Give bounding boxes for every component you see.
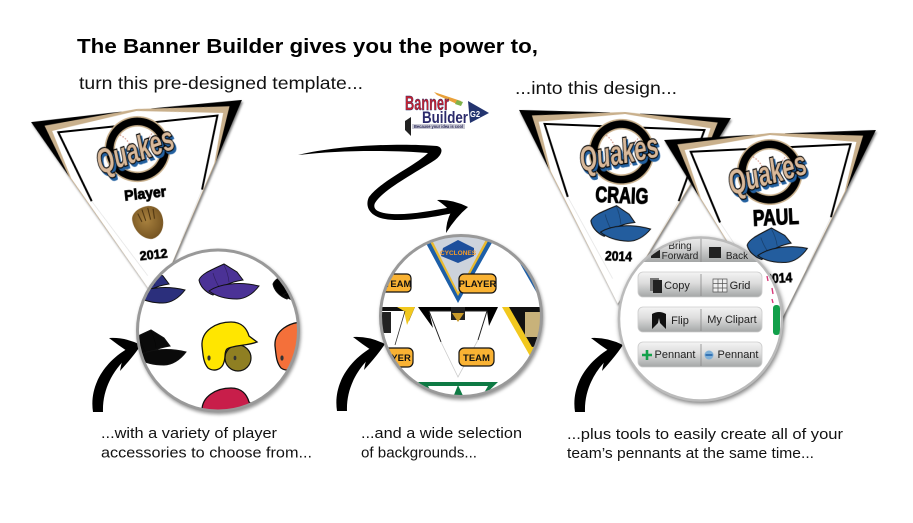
caption: tools: ...plus tools to easily create all of your <box>567 427 843 443</box>
icon: yellow helmet <box>202 322 257 371</box>
button: PLAYER cropped <box>388 347 414 368</box>
caption: tools: team’s pennants at the same time... <box>567 446 814 462</box>
icon: black cap <box>272 278 291 300</box>
caption: accessories: accessories to choose from... <box>101 446 312 462</box>
pennant: Paul: PAUL <box>752 204 799 231</box>
pennant: template <box>31 98 262 311</box>
button: PLAYER cropped: PLAYER <box>373 353 411 364</box>
logo: Banner Builder G2: Banner <box>405 93 449 115</box>
button: TEAM lower <box>459 348 494 366</box>
button row: pennant: Pennant <box>718 349 758 361</box>
button row: copy and grid <box>638 272 762 297</box>
button row: flip and clipart: My Clipart <box>707 314 757 326</box>
icon: glove <box>130 203 167 243</box>
pennant: Paul: 2014 <box>765 270 793 286</box>
caption: backgrounds: of backgrounds... <box>361 446 477 462</box>
blue pennant <box>426 237 492 303</box>
button row: arrange: Bring <box>668 241 692 252</box>
caption: backgrounds: ...and a wide selection <box>361 426 522 442</box>
panel: tools circle <box>619 232 782 400</box>
pennant: template: 2012 <box>139 246 168 263</box>
subheading: design: ...into this design... <box>515 78 677 98</box>
icon: blue cap <box>590 205 651 242</box>
button: TEAM lower: TEAM <box>463 353 490 364</box>
panel: backgrounds circle <box>378 234 546 402</box>
caption: backgrounds <box>361 426 522 462</box>
button: TEAM <box>386 273 412 293</box>
icon: crimson helmet <box>202 387 251 410</box>
button row: arrange <box>644 238 757 262</box>
logo: Banner Builder G2: Builder <box>422 108 468 127</box>
pennant: template: Player <box>123 183 167 205</box>
pennant row <box>376 307 545 377</box>
colour swatch scraps <box>767 276 773 303</box>
arrow: main curved <box>298 145 468 233</box>
pennant: Paul: Quakes <box>724 144 811 203</box>
caption: accessories: ...with a variety of player <box>101 426 277 442</box>
title: The Banner Builder gives you the power to, <box>77 35 538 58</box>
caption: accessories <box>101 426 312 462</box>
button: TEAM: TEAM <box>385 279 412 290</box>
arrow: accessories <box>92 338 141 412</box>
pennant: Craig: CRAIG <box>595 182 649 209</box>
panel: accessories circle <box>135 248 303 416</box>
pennant: Craig: Quakes <box>576 127 662 179</box>
caption: tools <box>567 427 843 462</box>
button row: arrange: Back <box>726 251 749 262</box>
logo: Banner Builder G2: Because your idea is cool <box>414 124 463 129</box>
pennant: template: Quakes <box>91 120 179 182</box>
icon: purple cap <box>199 264 259 299</box>
logo: Banner Builder G2 <box>405 92 489 136</box>
pennant: Craig <box>512 108 731 308</box>
arrow: backgrounds <box>336 337 385 411</box>
green pennant <box>418 382 498 395</box>
button row: flip and clipart <box>638 307 762 332</box>
button: PLAYER <box>459 274 496 293</box>
logo: Banner Builder G2: G2 <box>470 110 481 119</box>
subheading: template: turn this pre-designed template... <box>79 73 363 93</box>
blue pennant: CYCLONES <box>440 250 477 257</box>
icon: blue cap <box>746 226 808 264</box>
button row: flip and clipart: Flip <box>671 315 689 327</box>
button row: copy and grid: Grid <box>730 280 750 292</box>
pennant: Craig: 2014 <box>605 248 633 264</box>
button row: arrange: Forward <box>662 251 698 262</box>
button row: copy and grid: Copy <box>664 280 690 292</box>
arrow: tools <box>574 338 623 412</box>
pennant: Paul <box>664 128 885 330</box>
button: PLAYER: PLAYER <box>459 279 496 290</box>
icon: black cap large <box>139 329 187 366</box>
button row: pennant <box>638 342 762 367</box>
icon: orange helmet <box>274 322 297 371</box>
green tab <box>773 305 780 335</box>
button row: pennant: Pennant <box>655 349 695 361</box>
icon: navy cap <box>144 274 186 304</box>
